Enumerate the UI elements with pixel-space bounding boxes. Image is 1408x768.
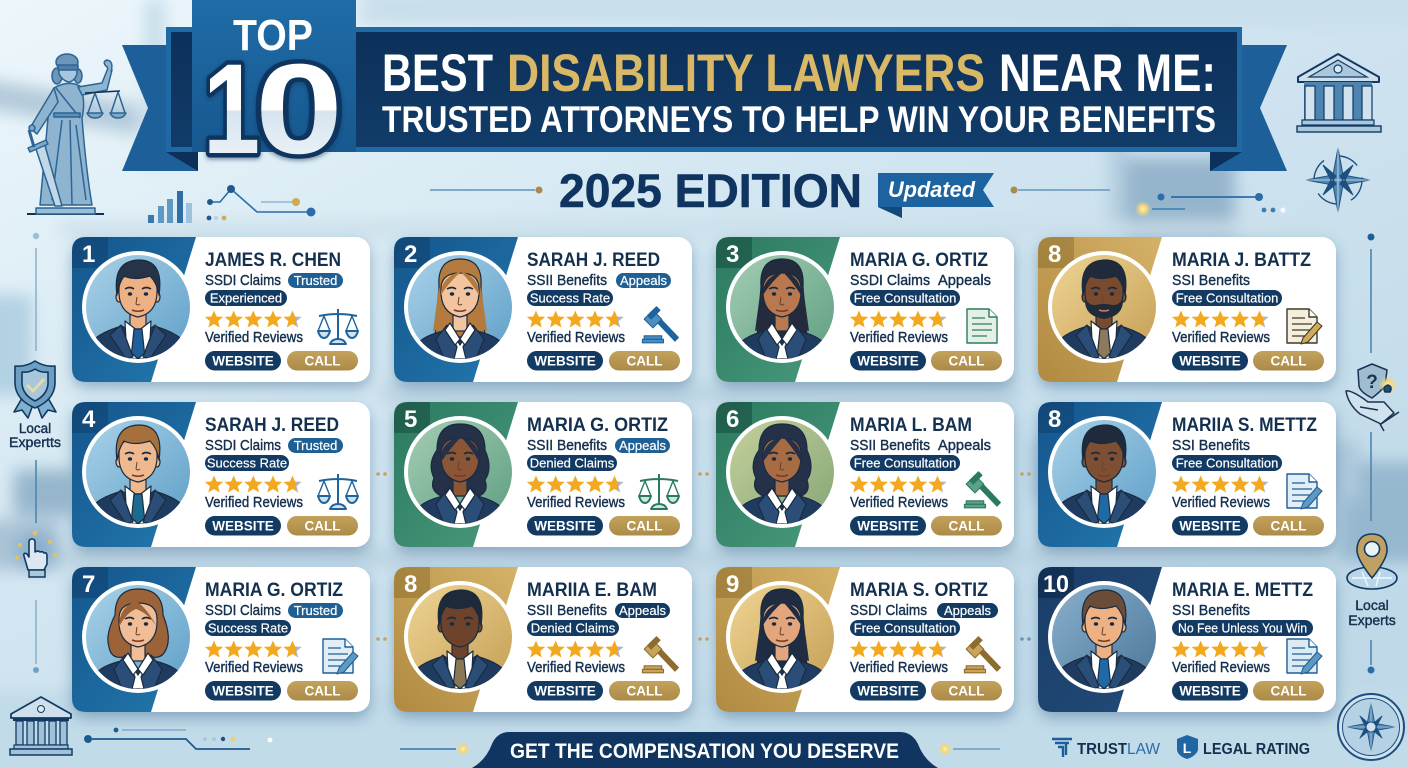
call button: CALL bbox=[304, 354, 340, 368]
logo: Legal Rating: L bbox=[1183, 740, 1192, 756]
specialty: SSDI Claims bbox=[205, 602, 281, 619]
ribbon banner with title bbox=[122, 0, 1287, 181]
website button: WEBSITE bbox=[1179, 354, 1241, 368]
card 1: James R. Chen bbox=[72, 237, 370, 382]
call button: CALL bbox=[948, 684, 984, 698]
name: MARIA E. METTZ bbox=[1172, 580, 1313, 601]
name: MARIIA E. BAM bbox=[527, 580, 657, 601]
website button bbox=[850, 681, 926, 700]
tag: appeals: Appeals bbox=[944, 603, 991, 618]
title line one: NEAR ME: bbox=[999, 44, 1216, 103]
rank number: 7 bbox=[82, 571, 95, 598]
rank number: 10 bbox=[1043, 571, 1069, 598]
specialty: SSII Benefits bbox=[527, 602, 607, 619]
title line one: BEST bbox=[382, 44, 493, 103]
bottom left connector decoration bbox=[84, 728, 470, 756]
tag: denied claims: Denied Claims bbox=[531, 620, 616, 636]
verified reviews: Verified Reviews bbox=[850, 659, 948, 676]
name: MARIA G. ORTIZ bbox=[205, 580, 343, 601]
tag: appeals plain: Appeals bbox=[938, 437, 991, 454]
logo: Legal Rating bbox=[1177, 735, 1310, 759]
label: local experts right: Experts bbox=[1348, 612, 1396, 628]
card 3: Maria G. Ortiz bbox=[716, 237, 1014, 382]
website button: WEBSITE bbox=[534, 354, 596, 368]
star rating bbox=[527, 640, 624, 658]
website button: WEBSITE bbox=[212, 354, 274, 368]
icon: gavel bbox=[964, 637, 1000, 673]
star rating bbox=[1172, 310, 1269, 328]
website button bbox=[1172, 351, 1248, 370]
icon: courthouse bottom left bbox=[10, 697, 72, 755]
call button bbox=[931, 681, 1002, 700]
main banner bbox=[166, 27, 1242, 152]
call button: CALL bbox=[304, 518, 340, 534]
icon: scales bbox=[318, 309, 358, 344]
icon: gavel bbox=[642, 637, 678, 673]
icon: column chart bbox=[148, 191, 192, 223]
tag: success rate: Success Rate bbox=[207, 456, 287, 470]
website button bbox=[527, 516, 603, 536]
right ribbon fold bbox=[1210, 152, 1242, 171]
logo: Legal Rating: LEGAL RATING bbox=[1203, 741, 1310, 758]
tag: appeals: Appeals bbox=[619, 438, 666, 453]
verified reviews: Verified Reviews bbox=[527, 494, 625, 511]
icon: lady justice statue bbox=[27, 54, 126, 214]
portrait bbox=[404, 251, 516, 363]
call button: CALL bbox=[948, 354, 984, 368]
name: MARIA S. ORTIZ bbox=[850, 580, 988, 601]
tag: experienced: Experienced bbox=[210, 290, 282, 306]
card 7: Maria G. Ortiz bbox=[72, 567, 370, 712]
website button bbox=[850, 516, 926, 536]
line chart decoration bbox=[207, 185, 316, 220]
rank number: 1 bbox=[82, 241, 95, 268]
rank number: 8 bbox=[1048, 241, 1061, 268]
website button bbox=[205, 351, 281, 370]
call button: CALL bbox=[626, 684, 662, 698]
call button: CALL bbox=[1270, 354, 1306, 368]
label: local experts right bbox=[1348, 597, 1396, 628]
tag: trusted: Trusted bbox=[294, 273, 337, 288]
portrait bbox=[404, 416, 516, 528]
portrait bbox=[726, 416, 838, 528]
card 10: Maria E. Mettz bbox=[1038, 567, 1336, 712]
portrait bbox=[82, 416, 194, 528]
tag: success rate: Success Rate bbox=[530, 290, 610, 306]
website button bbox=[205, 681, 281, 700]
call button bbox=[1253, 516, 1324, 536]
icon: compass medallion bbox=[1338, 694, 1404, 760]
updated ribbon bbox=[878, 173, 994, 218]
verified reviews: Verified Reviews bbox=[1172, 329, 1270, 346]
star rating bbox=[205, 476, 302, 492]
verified reviews: Verified Reviews bbox=[850, 329, 948, 346]
call button bbox=[609, 681, 680, 700]
website button: WEBSITE bbox=[1179, 518, 1241, 534]
icon: document with pen bbox=[1287, 639, 1322, 674]
tag: trusted: Trusted bbox=[294, 603, 337, 618]
top ten tab bbox=[192, 0, 356, 181]
tag: free consultation: Free Consultation bbox=[1176, 290, 1278, 306]
portrait bbox=[1048, 251, 1160, 363]
tag: appeals: Appeals bbox=[619, 603, 666, 618]
call button: CALL bbox=[1270, 518, 1306, 534]
website button bbox=[1172, 516, 1248, 536]
card 8: Mariia S. Mettz bbox=[1038, 402, 1336, 547]
verified reviews: Verified Reviews bbox=[850, 494, 948, 511]
icon: scales bbox=[639, 474, 679, 509]
card 5: Maria G. Ortiz bbox=[394, 402, 692, 547]
website button bbox=[527, 351, 603, 370]
verified reviews: Verified Reviews bbox=[527, 329, 625, 346]
rank number: 8 bbox=[1048, 406, 1061, 433]
star rating bbox=[527, 310, 624, 328]
star rating bbox=[205, 310, 302, 328]
website button: WEBSITE bbox=[534, 684, 596, 698]
card 8: Mariia E. Bam bbox=[394, 567, 692, 712]
call button bbox=[609, 516, 680, 536]
star rating bbox=[850, 310, 947, 328]
tag: success rate: Success Rate bbox=[208, 620, 288, 636]
name: JAMES R. CHEN bbox=[205, 250, 341, 271]
label: local experts left: Expertts bbox=[9, 435, 61, 450]
website button: WEBSITE bbox=[212, 684, 274, 698]
title line one bbox=[382, 44, 1216, 103]
tag: free consultation: Free Consultation bbox=[854, 620, 956, 636]
call button: CALL bbox=[626, 518, 662, 534]
icon: shield and open hand bbox=[1346, 364, 1399, 431]
specialty: SSDI Claims bbox=[205, 437, 281, 454]
rank number: 8 bbox=[404, 571, 417, 598]
tag: appeals: Appeals bbox=[620, 273, 667, 288]
label: local experts left: Local bbox=[19, 421, 51, 436]
call to action bar: GET THE COMPENSATION YOU DESERVE bbox=[510, 740, 899, 763]
website button: WEBSITE bbox=[534, 518, 596, 534]
call button bbox=[287, 681, 358, 700]
label: local experts right: Local bbox=[1355, 597, 1389, 613]
icon: document with pen bbox=[1287, 474, 1322, 509]
specialty: SSII Benefits bbox=[850, 437, 930, 454]
card 6: Maria L. Bam bbox=[716, 402, 1014, 547]
card 2: Sarah J. Reed bbox=[394, 237, 692, 382]
website button: WEBSITE bbox=[212, 518, 274, 534]
bottom right connector decoration bbox=[938, 742, 1000, 756]
star rating bbox=[850, 476, 947, 492]
specialty: SSI Benefits bbox=[1172, 602, 1250, 619]
icon: document with pen bbox=[1287, 309, 1322, 344]
connector dots between cards bbox=[376, 472, 1031, 641]
portrait bbox=[82, 581, 194, 693]
big 10 numeral: 0 bbox=[255, 38, 343, 181]
icon: gavel bbox=[642, 307, 678, 343]
call button bbox=[1253, 351, 1324, 370]
name: MARIA L. BAM bbox=[850, 415, 972, 436]
call button bbox=[931, 351, 1002, 370]
title line two: TRUSTED ATTORNEYS TO HELP WIN YOUR BENEFITS bbox=[382, 99, 1216, 140]
website button: WEBSITE bbox=[857, 684, 919, 698]
big 10 numeral: 1 bbox=[203, 38, 260, 181]
icon: shield and open hand: ? bbox=[1366, 372, 1378, 393]
portrait bbox=[404, 581, 516, 693]
star rating bbox=[1172, 476, 1269, 492]
icon: pointer hand with sparkles bbox=[15, 531, 57, 577]
verified reviews: Verified Reviews bbox=[527, 659, 625, 676]
updated ribbon: Updated bbox=[888, 177, 976, 202]
card 9: Maria S. Ortiz bbox=[716, 567, 1014, 712]
portrait bbox=[1048, 416, 1160, 528]
website button bbox=[1172, 681, 1248, 700]
star rating bbox=[1172, 640, 1269, 658]
icon: courthouse top right bbox=[1297, 54, 1381, 132]
tag: free consultation: Free Consultation bbox=[1176, 456, 1278, 470]
website button bbox=[205, 516, 281, 536]
tag: denied claims: Denied Claims bbox=[530, 456, 615, 470]
specialty: SSII Benefits bbox=[527, 437, 607, 454]
website button: WEBSITE bbox=[857, 518, 919, 534]
icon: shield badge bbox=[14, 361, 56, 418]
right connector bbox=[1010, 186, 1110, 194]
specialty: SSDI Claims bbox=[205, 272, 281, 289]
name: MARIIA S. METTZ bbox=[1172, 415, 1317, 436]
card 8: Maria J. Battz bbox=[1038, 237, 1336, 382]
rank number: 3 bbox=[726, 241, 739, 268]
label: local experts left bbox=[9, 421, 61, 450]
card 4: Sarah J. Reed bbox=[72, 402, 370, 547]
logo: TrustLaw: LAW bbox=[1127, 741, 1161, 758]
website button: WEBSITE bbox=[1179, 684, 1241, 698]
right side timeline bbox=[1368, 234, 1374, 674]
verified reviews: Verified Reviews bbox=[205, 329, 303, 346]
icon: gavel bbox=[964, 472, 1000, 508]
tag: free consultation: Free Consultation bbox=[854, 456, 956, 470]
star rating bbox=[527, 476, 624, 492]
icon: map pin bbox=[1347, 534, 1397, 589]
call button bbox=[609, 351, 680, 370]
tag: appeals plain: Appeals bbox=[938, 272, 991, 289]
verified reviews: Verified Reviews bbox=[1172, 494, 1270, 511]
call button bbox=[287, 351, 358, 370]
name: MARIA J. BATTZ bbox=[1172, 250, 1311, 271]
verified reviews: Verified Reviews bbox=[1172, 659, 1270, 676]
call button bbox=[287, 516, 358, 536]
website button bbox=[527, 681, 603, 700]
call button: CALL bbox=[948, 518, 984, 534]
call button: CALL bbox=[1270, 684, 1306, 698]
rank number: 4 bbox=[82, 406, 96, 433]
specialty: SSII Benefits bbox=[527, 272, 607, 289]
TOP label: TOP bbox=[233, 11, 313, 60]
verified reviews: Verified Reviews bbox=[205, 659, 303, 676]
2025 edition text: 2025 EDITION bbox=[559, 164, 862, 217]
tag: no fee: No Fee Unless You Win bbox=[1178, 620, 1307, 636]
website button: WEBSITE bbox=[857, 354, 919, 368]
icon: document bbox=[967, 309, 997, 343]
name: MARIA G. ORTIZ bbox=[527, 415, 668, 436]
left connector bbox=[430, 186, 542, 194]
left side timeline bbox=[33, 233, 39, 673]
star rating bbox=[205, 640, 302, 658]
logo: TrustLaw: TRUST bbox=[1077, 741, 1127, 758]
specialty: SSI Benefits bbox=[1172, 437, 1250, 454]
top right connector decoration bbox=[1135, 193, 1286, 217]
tag: trusted: Trusted bbox=[294, 438, 337, 453]
website button bbox=[850, 351, 926, 370]
edition heading bbox=[430, 164, 1110, 218]
rank number: 5 bbox=[404, 406, 417, 433]
portrait bbox=[726, 251, 838, 363]
tag: free consultation: Free Consultation bbox=[854, 290, 956, 306]
left ribbon tail bbox=[122, 45, 198, 171]
call button: CALL bbox=[304, 684, 340, 698]
specialty: SSDI Claims bbox=[850, 602, 927, 619]
icon: document with pen bbox=[323, 639, 358, 674]
call button: CALL bbox=[626, 354, 662, 368]
portrait bbox=[82, 251, 194, 363]
portrait bbox=[1048, 581, 1160, 693]
name: MARIA G. ORTIZ bbox=[850, 250, 988, 271]
big 10 numeral bbox=[203, 38, 343, 181]
star rating bbox=[850, 640, 947, 658]
left ribbon fold bbox=[166, 152, 198, 171]
rank number: 9 bbox=[726, 571, 739, 598]
title line one: DISABILITY LAWYERS bbox=[507, 44, 985, 103]
specialty: SSDI Claims bbox=[850, 272, 930, 289]
call to action bar bbox=[472, 732, 938, 768]
name: SARAH J. REED bbox=[527, 250, 660, 271]
call button bbox=[931, 516, 1002, 536]
verified reviews: Verified Reviews bbox=[205, 494, 303, 511]
rank number: 2 bbox=[404, 241, 417, 268]
call button bbox=[1253, 681, 1324, 700]
portrait bbox=[726, 581, 838, 693]
name: SARAH J. REED bbox=[205, 415, 339, 436]
specialty: SSI Benefits bbox=[1172, 272, 1250, 289]
icon: scales bbox=[318, 474, 358, 509]
logo: TrustLaw bbox=[1052, 739, 1161, 758]
rank number: 6 bbox=[726, 406, 739, 433]
right ribbon tail bbox=[1210, 45, 1287, 171]
icon: compass star top right bbox=[1306, 148, 1370, 212]
